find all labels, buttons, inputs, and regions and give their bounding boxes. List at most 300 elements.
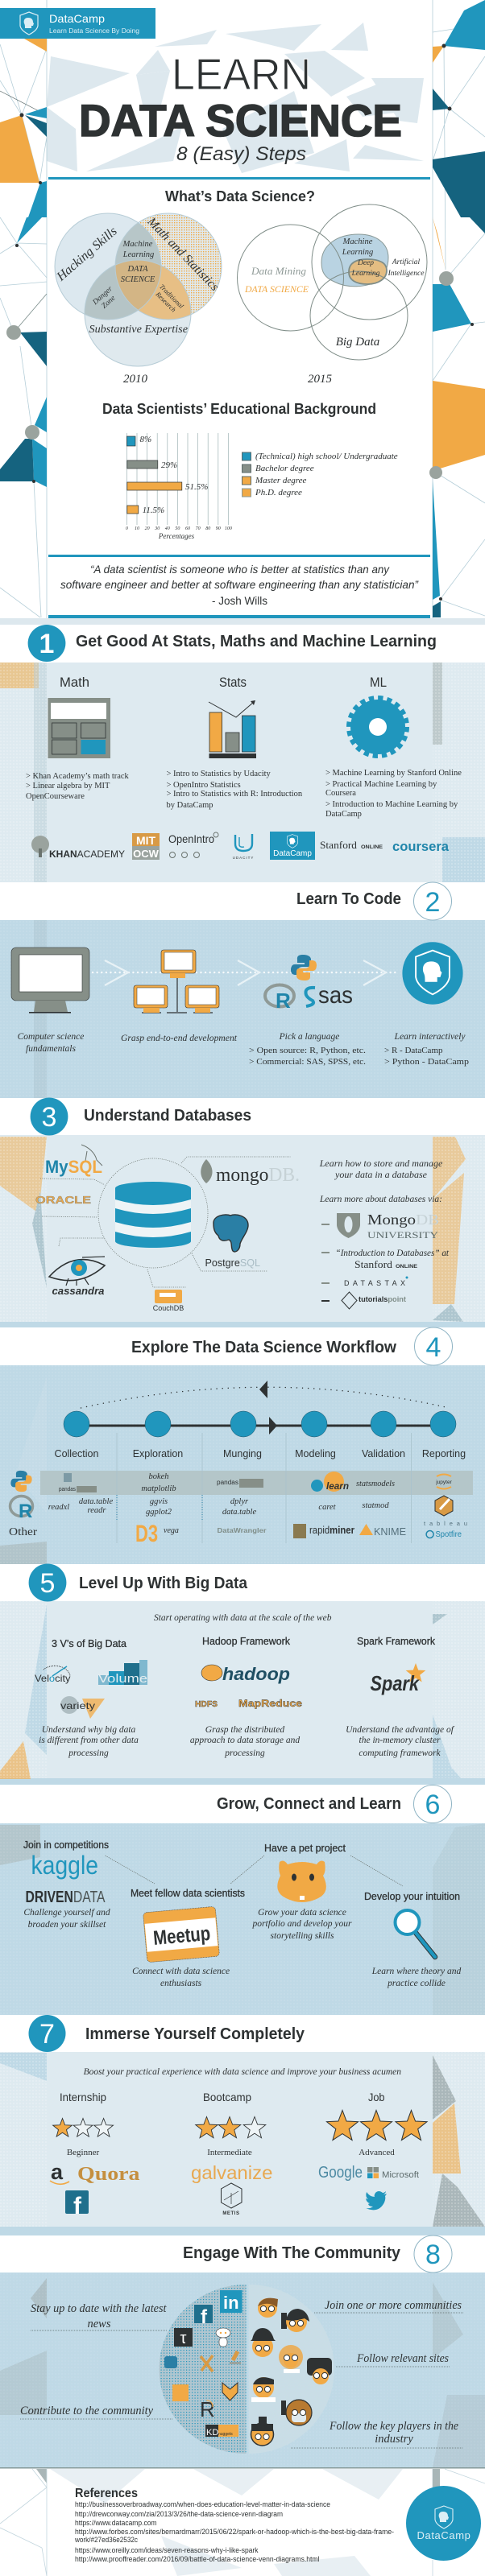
collection tools: data.table [79,1497,113,1506]
logo: Khan Academy [31,836,125,860]
icon: database [115,1182,191,1248]
text: end-to-end: Grasp end-to-end development [121,1034,238,1043]
logo: DataCamp: DataCamp [273,849,312,858]
reference links: https://www.datacamp.com [75,2519,156,2527]
exploration tools [141,1472,176,1517]
header badge: DataCamp [0,8,155,39]
logo: Khan Academy: KHANACADEMY [49,848,125,860]
resource: intro to databases: “Introduction to Databases” at [335,1249,450,1258]
text: computer science: fundamentals [26,1044,77,1054]
tool rows backgrounds [40,1433,473,1543]
column: Internship: Internship [60,2091,106,2103]
person 4 [279,2345,303,2373]
logo: Udacity: UDACITY [233,856,254,860]
icon: fox [222,2383,238,2401]
logo: Tutorialspoint: tutorialspoint [359,1295,406,1303]
subtitle: 8 (Easy) Steps [176,143,306,165]
modeling tools: learn [326,1480,349,1492]
person 7 [281,2400,312,2425]
logo: MongoDB University: UNIVERSITY [367,1229,438,1241]
reporting tools [435,1475,453,1516]
panel: step 3 [35,1145,450,1312]
icon: velocity: Velocity [35,1673,71,1684]
axis tick labels: 0 [126,526,128,531]
column: Job: Advanced [359,2148,395,2157]
step 3 heading: Understand Databases [84,1107,251,1125]
person 5 [307,2358,332,2384]
text: grow portfolio: storytelling skills [271,1931,334,1941]
stage labels: Collection [55,1448,98,1459]
bar: 51.5%: 51.5% [185,482,208,492]
column heading: 3 Vs: 3 V’s of Big Data [52,1637,127,1649]
bar chart: education [126,433,232,540]
icon: Tumblr-style T: τ [180,2330,187,2347]
axis tick labels: 80 [205,526,210,531]
icon: KDnuggets: nuggets [218,2432,233,2437]
chart legend [242,452,398,497]
icon: Reddit [216,2328,230,2347]
icon: monitor [11,947,89,1013]
heading: educational background: Data Scientists’ Educational Background [102,401,376,417]
text: stats resources: by DataCamp [166,801,213,810]
panel: step 7 [50,2066,427,2219]
logo: DataCamp [270,832,315,860]
reporting tools: jupyter [435,1480,453,1485]
icon: orange square [172,2384,189,2401]
column: Bootcamp: Bootcamp [203,2091,251,2103]
venn diagram 2015 [237,204,427,386]
step 5 heading [0,1563,485,1602]
logo: Python [291,955,317,980]
text: learn interactively: > Python - DataCamp [384,1057,470,1067]
step 8 heading [0,2235,485,2273]
text: key players: industry [375,2433,413,2446]
exploration tools: ggplot2 [146,1508,172,1517]
quote [60,564,419,607]
logo: Kaggle: kaggle [31,1851,98,1880]
exploration tools: ggvis [150,1497,168,1506]
text: ML resources: > Practical Machine Learning by [325,780,437,789]
venn label: Traditional Research: Research [154,290,178,314]
text: ML resources: > Introduction to Machine Learning by [325,800,458,809]
step 7 heading [0,2015,485,2052]
other tools: DataWrangler [218,1527,266,1534]
text: theory and practice: practice collide [387,1979,446,1988]
logo: Metis: METIS [222,2211,240,2216]
text: stay up to date [31,2302,167,2330]
collection tools: pandas [59,1487,76,1492]
icon: Meetup name tag: Meetup [152,1922,211,1950]
munging tools: data.table [222,1508,256,1517]
reference links: work/#27ed36e2532c [74,2536,138,2544]
text: why big data: Understand why big data [42,1725,136,1735]
column heading: ML: ML [370,675,387,690]
row icon: Python [10,1471,32,1492]
reference links: http://www.forbes.com/sites/bernardmarr/2015/06/22/spark-or-hadoop-which-is-the-best-big-data-frame- [75,2528,394,2536]
arrow: dotted path with chevrons [93,960,396,985]
logo: Hadoop: hadoop [222,1664,290,1684]
column: Job: Job [368,2091,385,2103]
column: Bootcamp [196,2091,266,2157]
icon: DataCamp shield [20,12,38,35]
venn label: Artificial Intelligence: Intelligence [388,270,424,278]
bar: 8%: 8% [140,435,151,444]
text: ML resources: DataCamp [325,810,362,819]
footer network [0,2469,485,2576]
chart legend: (Technical) high school/ Undergraduate [255,452,398,461]
icon: LinkedIn [220,2290,242,2313]
axis tick labels: 10 [135,526,139,531]
logo: Stanford Online [320,839,383,851]
logo: CouchDB [153,1290,184,1312]
step 7 heading: Immerse Yourself Completely [85,2025,305,2043]
icon: network of monitors [134,950,219,1013]
logo: Twitter [366,2191,387,2210]
chart legend: Bachelor degree [255,464,314,473]
panel: step 1 columns [26,675,462,860]
section tints [0,663,485,2467]
icon: variety: variety [60,1700,95,1711]
text: learn interactively: Learn interactively [394,1032,466,1042]
text: grow portfolio: Grow your data science [258,1908,346,1918]
icon: calculator [48,698,110,758]
axis tick labels: 20 [145,526,150,531]
text: key players: Follow the key players in the [329,2420,459,2433]
other tools: tableau [424,1520,467,1527]
stage labels: Modeling [295,1448,336,1459]
text: stats resources: > OpenIntro Statistics [166,781,241,790]
reference links: https://www.oreilly.com/ideas/seven-reasons-why-i-like-spark [75,2546,259,2554]
icon: volume [98,1660,147,1686]
icon: gear [349,698,407,756]
column: Internship [53,2091,113,2157]
text: pick a language [249,1032,366,1067]
intro text: Boost your practical experience with data science and improve your business acumen [84,2066,401,2077]
logo: R [265,985,294,1013]
axis title: Percentages [158,532,195,540]
icon: tools [201,2355,213,2372]
other tools: KNIME [374,1525,406,1538]
icon: hamster [277,1861,326,1902]
stage labels: Validation [362,1448,405,1459]
logo: Metis [221,2183,242,2216]
axis tick labels: 30 [154,526,160,531]
text: challenge: Challenge yourself and [23,1908,110,1918]
title main line: DATA SCIENCE [79,95,402,146]
text: pick a language: > Commercial: SAS, SPSS, etc. [249,1057,366,1067]
icon: R-bloggers: R [200,2397,215,2421]
munging tools [217,1479,263,1517]
text: distributed approach: processing [224,1748,265,1758]
logo: Quora: Quora [77,2164,140,2185]
stipple [0,663,485,2467]
step 2 heading [296,882,451,920]
venn label: Deep Learning: Learning [351,270,380,278]
modeling tools: caret [318,1503,337,1512]
year 2015: 2015 [308,373,332,386]
logo: Udacity [233,834,254,860]
text: store and manage: your data in a database [334,1169,428,1180]
community circle [160,2285,334,2454]
logo: DataStax [321,1277,408,1287]
logo: SAS: sas [318,982,353,1009]
venn label: Data Mining: Data Mining [251,265,306,277]
column heading: Math: Math [60,675,89,690]
step 4 heading [0,1327,485,1365]
text: stay up to date: Stay up to date with the latest [31,2302,167,2315]
logo: MySQL: MySQL [45,1157,102,1177]
text: follow sites: Follow relevant sites [356,2352,449,2365]
text: learn interactively [384,1032,470,1067]
text: stats resources: > Intro to Statistics by Udacity [166,770,272,778]
logo: PostgreSQL: PostgreSQL [205,1257,260,1269]
icon: KDnuggets [205,2425,238,2438]
label: pet project: Have a pet project [264,1842,346,1854]
logo: Stanford Online: Stanford [320,839,358,851]
panel: step 4 workflow [9,1381,473,1547]
venn label: Math and Statistics: Math and Statistics [144,214,222,294]
axis tick labels: 70 [196,526,201,531]
resource: intro to databases: ONLINE [396,1264,418,1269]
step 1 heading: Get Good At Stats, Maths and Machine Learning [76,632,437,650]
icon: Facebook [194,2305,213,2328]
label: meet fellow: Meet fellow data scientists [131,1887,245,1899]
text: store and manage: Learn how to store and manage [319,1158,443,1169]
step 3 heading: 3 [42,1102,56,1133]
step 8 heading: Engage With The Community [183,2244,401,2262]
logo: MongoDB University: Mongo DB [367,1212,439,1228]
chart legend: Ph.D. degree [255,488,302,497]
munging tools: pandas [217,1479,238,1486]
logo: Tutorialspoint [321,1292,406,1309]
stage labels [55,1448,466,1459]
icon: KDnuggets: KD [206,2428,218,2438]
logo: SAS [305,982,353,1009]
axis tick labels: 50 [175,526,180,531]
row icon: R [10,1496,32,1522]
chart legend: Master degree [255,476,307,485]
text: stay up to date: news [87,2318,111,2330]
logo: MIT OCW [132,833,160,860]
exploration tools: matplotlib [141,1484,176,1493]
panel: step 5 [35,1612,455,1758]
text: join communities: Join one or more communities [325,2299,462,2312]
year 2010: 2010 [123,373,148,386]
text: contribute: Contribute to the community [20,2405,154,2417]
logo: Galvanize: galvanize [191,2162,272,2183]
logo: MongoDB [201,1159,300,1186]
step 2 heading: 2 [425,887,440,918]
footer badge: DataCamp: DataCamp [417,2529,470,2541]
text: pick a language: Pick a language [279,1032,339,1042]
logo: Coursera: coursera [392,839,450,854]
text: why big data: is different from other data [39,1736,139,1745]
text: distributed approach: approach to data storage and [190,1736,300,1745]
bar: 29%: 29% [161,460,177,470]
logo: Amazon [50,2160,69,2184]
intro text: Start operating with data at the scale of the web [154,1612,332,1623]
quote: software engineer and better at software engineering than any statistician” [60,579,419,591]
venn label: Machine Learning: Machine [342,237,373,246]
logo: Microsoft: Microsoft [382,2170,419,2180]
logo: MongoDB University [321,1212,439,1241]
modeling tools: statsmodels [356,1480,395,1488]
panel: step 2 [11,942,470,1067]
person 6 [251,2377,276,2402]
text: why big data: processing [68,1748,109,1758]
other tools: D3 [135,1521,158,1547]
icon: archive site [230,2351,241,2364]
arrow: feedback loop [81,1381,446,1408]
person 8 [251,2417,274,2446]
text: spark advantage: the in-memory cluster [359,1736,441,1745]
other tools [135,1520,467,1547]
axis tick labels: 40 [165,526,170,531]
logo: MongoDB: mongoDB. [216,1165,300,1186]
logo: DataStax: DATASTAX [344,1279,405,1287]
venn label: Machine Learning: Machine [122,240,153,249]
row label: Other: Other [9,1526,37,1538]
logo: Stanford Online: ONLINE [361,844,383,850]
venn label: Machine Learning: Learning [122,250,154,259]
collection tools [48,1473,113,1515]
icon: volume: Volume [98,1672,147,1686]
text: connect: Connect with data science [132,1967,230,1976]
text: ML resources: > Machine Learning by Stanford Online [325,769,462,778]
logo: Cassandra [49,1257,105,1297]
connector lines [40,1157,291,1287]
text: math resources: > Linear algebra by MIT [26,782,110,791]
references [74,2487,394,2563]
logo: Cassandra: cassandra [52,1285,105,1297]
resource: intro to databases: Stanford [354,1258,393,1270]
text: learn more: Learn more about databases via: [319,1193,442,1204]
modeling tools [311,1472,395,1512]
logo: Microsoft [367,2167,419,2180]
step 7 heading: 7 [39,2019,55,2050]
venn label: Danger Zone: Zone [101,295,117,311]
text: connect: enthusiasts [160,1979,202,1988]
resource: intro to databases [321,1249,450,1270]
icon: DataCamp head [402,942,463,1005]
step 2 heading: Learn To Code [296,890,401,908]
text: stats resources: > Intro to Statistics with R: Introduction [166,790,303,799]
other tools: vega [164,1526,179,1535]
venn label: Data Science: SCIENCE [121,275,155,284]
logo: Hadoop [195,1664,302,1709]
logo: Spark: Spark [371,1671,420,1695]
logo: R: R [276,989,291,1013]
logo: CouchDB: CouchDB [153,1304,184,1312]
axis tick labels: 100 [225,526,232,531]
logo: MIT OCW: MIT [136,834,155,847]
icon: Tumblr-style T [174,2328,193,2347]
other tools: rapidminer [309,1524,354,1536]
label: intuition: Develop your intuition [364,1890,460,1902]
venn label: Hacking Skills: Hacking Skills [54,225,120,284]
step 1 heading: 1 [39,629,54,659]
logo: Google: Google [318,2164,363,2182]
axis tick labels: 60 [185,526,190,531]
venn diagram 2010 [54,213,222,386]
step 6 heading: Grow, Connect and Learn [217,1795,401,1813]
venn label: Substantive Expertise: Substantive Expertise [89,324,188,336]
collection tools: readxl [48,1503,69,1512]
icon: bar chart with trend arrow [209,700,256,758]
venn label: Traditional Research: Traditional [158,283,186,310]
venn label: Danger Zone: Danger [91,285,114,308]
venn label: Deep Learning: Deep [357,259,374,267]
column: Bootcamp: Intermediate [207,2148,252,2157]
other tools: Spotfire [435,1530,462,1539]
footer badge: DataCamp [406,2486,481,2561]
text: distributed approach: Grasp the distributed [205,1725,284,1735]
step 3 heading [0,1098,485,1135]
text: computer science: Computer science [18,1032,84,1042]
quote: “A data scientist is someone who is better at statistics than any [90,564,390,576]
icon: variety [60,1696,105,1719]
logo: OpenIntro [168,832,218,858]
venn label: Artificial Intelligence: Artificial [392,258,421,266]
person 1 [258,2298,278,2318]
text: learn interactively: > R - DataCamp [384,1046,443,1055]
text: math resources: > Khan Academy’s math track [26,772,130,781]
logo: Hadoop: HDFS [195,1700,218,1709]
munging tools: dplyr [230,1497,249,1506]
text: ML resources: Coursera [325,789,356,798]
person 3 [251,2328,276,2357]
heading: What's Data Science: What’s Data Science? [165,188,315,204]
icon: velocity [35,1666,71,1684]
venn label: Data Science: DATA [126,265,148,274]
logo: Facebook: f [73,2193,82,2219]
step 5 heading: Level Up With Big Data [79,1575,248,1592]
column heading: Stats: Stats [219,675,247,690]
exploration tools: bokeh [148,1472,169,1481]
text: key players [291,2420,463,2448]
step 1 heading [28,625,437,662]
text: pick a language: > Open source: R, Python, etc. [249,1046,366,1055]
stage labels: Munging [223,1448,262,1459]
logo: DrivenData: DRIVENDATA [26,1889,106,1906]
reference links: http://businessoverbroadway.com/when-does-education-level-matter-in-data-science [75,2500,330,2508]
person 2 [281,2309,309,2332]
step 5 heading: 5 [40,1568,55,1599]
text: spark advantage: Understand the advantage of [346,1725,455,1735]
venn label: Data Science: DATA SCIENCE [244,285,309,295]
step 6 heading [0,1785,485,1823]
column heading: Hadoop: Hadoop Framework [202,1635,290,1647]
label: competitions: Join in competitions [23,1839,109,1851]
reference links: http://www.prooffreader.com/2016/09/battle-of-data-science-venn-diagrams.html [75,2555,319,2563]
panel: step 8 [20,2285,463,2454]
panel: step 6 [23,1839,461,1988]
reference links [74,2500,394,2563]
icon: LinkedIn: in [223,2293,239,2313]
text: math resources: OpenCourseware [26,792,85,801]
step 8 heading: 8 [425,2240,441,2270]
logo: Oracle: ORACLE [35,1194,91,1206]
logo: Hadoop: MapReduce [238,1698,302,1709]
step 6 heading: 6 [425,1790,440,1820]
column: Job [327,2091,427,2157]
text: theory and practice: Learn where theory and [371,1967,461,1976]
text: spark advantage: computing framework [359,1748,441,1758]
stage labels: Reporting [422,1448,466,1459]
venn label: Big Data: Big Data [336,336,379,349]
reference links: http://drewconway.com/zia/2013/3/26/the-data-science-venn-diagram [75,2510,283,2518]
people portraits [251,2298,332,2446]
